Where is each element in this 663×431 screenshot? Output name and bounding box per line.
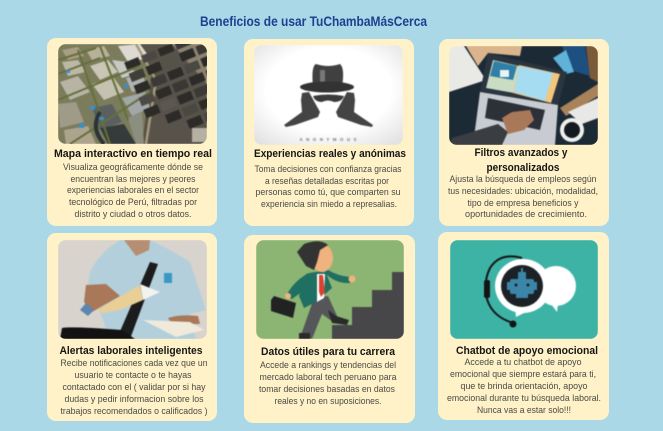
text block: encuentran las mejores y peores <box>70 174 196 184</box>
image: aerial city map <box>58 44 207 144</box>
text block: tus necesidades: ubicación, modalidad, <box>448 186 598 196</box>
panel: chatbot <box>438 232 609 420</box>
text block: dudas y pedir informacion sobre los <box>64 394 204 404</box>
heading: Chatbot de apoyo emocional <box>456 345 598 357</box>
heading: Mapa interactivo en tiempo real <box>54 148 212 160</box>
image: chatbot robot with headset <box>450 240 598 339</box>
text block <box>259 360 397 406</box>
image: man climbing stairs <box>256 240 404 339</box>
text block: emocional que siempre estará para ti, <box>450 369 596 379</box>
text block: contactado con el ( validar por si hay <box>62 382 206 392</box>
text block <box>448 174 598 219</box>
image: anonymous figure: ANONYMOUS <box>300 137 356 142</box>
panel: datos útiles <box>244 235 415 423</box>
text block: experiencia sin miedo a represalias. <box>261 199 397 209</box>
text block: tomar decisiones basadas en datos <box>259 384 395 394</box>
heading: personalizados <box>486 162 560 174</box>
text block <box>60 358 208 416</box>
heading: Alertas laborales inteligentes <box>60 345 203 357</box>
heading: Filtros avanzados y <box>474 147 568 159</box>
text block: trabajos recomendados o calificados ) <box>60 406 208 416</box>
text block: Toma decisiones con confianza gracias <box>254 164 402 174</box>
text block <box>254 164 402 209</box>
text block: Accede a rankings y tendencias del <box>260 360 396 370</box>
text block: emocional durante tu búsqueda laboral. <box>447 393 601 403</box>
text block: distrito y ciudad o otros datos. <box>74 209 192 219</box>
image: laptop on desk <box>449 46 598 145</box>
panel: mapa interactivo <box>47 38 217 226</box>
text block: reales y no en suposiciones. <box>274 396 382 406</box>
text block: experiencias laborales en el sector <box>67 185 199 195</box>
heading: Datos útiles para tu carrera <box>261 346 395 358</box>
text block: Accede a tu chatbot de apoyo <box>464 357 582 367</box>
title: Beneficios de usar TuChambaMásCerca <box>200 13 427 29</box>
text block: tecnológico de Perú, filtradas por <box>69 197 197 207</box>
text block: Recibe notificaciones cada vez que un <box>60 358 208 368</box>
text block: mercado laboral tech peruano para <box>260 372 397 382</box>
text block: a reseñas detalladas escritas por <box>265 176 389 186</box>
text block: personas como tú, que comparten su <box>256 187 400 197</box>
text block: Visualiza geográficamente dónde se <box>63 162 203 172</box>
text block: Ajusta la búsqueda de empleos según <box>450 174 596 184</box>
text block <box>63 162 203 219</box>
panel: experiencias reales <box>244 39 414 226</box>
panel: filtros avanzados <box>439 39 609 226</box>
heading: Experiencias reales y anónimas <box>254 148 406 160</box>
text block: Nunca vas a estar solo!!! <box>477 405 571 415</box>
image: anonymous figure <box>254 45 403 145</box>
text block <box>447 357 601 415</box>
heading <box>474 147 568 174</box>
text block: usuario te contacte o te hayas <box>74 370 192 380</box>
text block: que te brinda orientación, apoyo <box>460 381 588 391</box>
image: mail carrier <box>58 240 207 339</box>
text block: tipo de empresa beneficios y <box>468 198 579 208</box>
panel: alertas laborales <box>47 233 217 421</box>
text block: oportunidades de crecimiento. <box>465 209 587 219</box>
